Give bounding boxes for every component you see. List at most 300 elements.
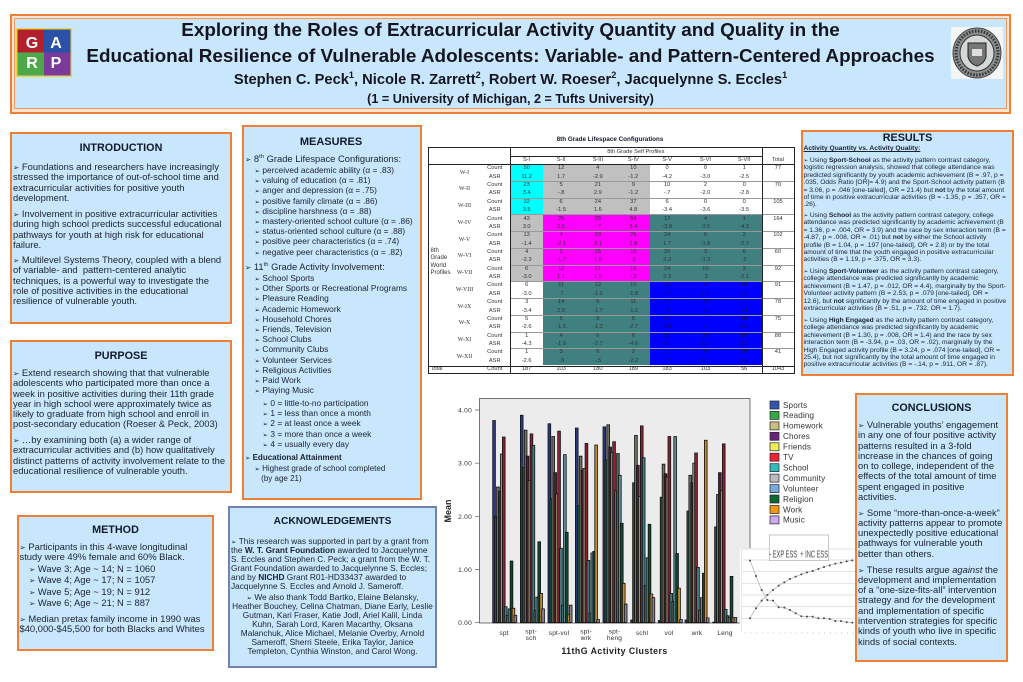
text: thanks: Malanchuk, Alice Michael, Melanie Overby, Arnold [241, 628, 424, 638]
chart legend: Sports [783, 401, 807, 410]
table: cross-tabulation of world and self profiles: 0 [743, 199, 746, 205]
text: purpose paragraph 2 [13, 434, 225, 476]
chart legend: Chores [783, 432, 810, 441]
table: cross-tabulation of world and self profiles: 91 [775, 282, 781, 288]
text: activity list: ➢ School Clubs [254, 334, 312, 344]
table: cross-tabulation of world and self profiles: ASR [489, 174, 501, 180]
table: cross-tabulation of world and self profiles: Count [487, 249, 502, 255]
table: cross-tabulation of world and self profiles: Count [487, 199, 502, 205]
text: sport-school result: ➢ Using Sport-School as the activity pattern contrast category, [804, 157, 990, 164]
text: purpose paragraph 1: year in high school were approximately twice as [13, 398, 212, 409]
text: conclusion 2 [858, 506, 1002, 559]
text: lifespace list [254, 165, 413, 257]
title: Educational Resilience of Vulnerable Adolescents: Variable- and Pattern-Centered Approaches [86, 46, 935, 66]
table: cross-tabulation of world and self profiles: 6 [596, 349, 599, 355]
text: funding: S. Eccles and Stephen C. Peck; a grant from the W. T. [231, 554, 430, 564]
table: cross-tabulation of world and self profiles: 3.0 [523, 224, 531, 230]
inset line chart: exp ess and inc ess [740, 535, 855, 637]
text: conclusion 1: effects of the total amount of time [858, 470, 996, 481]
text: method waves: ➢ Wave 5; Age ~ 19; N = 912 [29, 586, 150, 597]
text: purpose paragraph 1: likely to graduate from high school and enroll in [13, 408, 209, 419]
table: cross-tabulation of world and self profiles: 2 [704, 182, 707, 188]
text: school result: = 1.36, p = .004, OR = 3.9) and the race by sex interaction term (B = [804, 227, 1006, 234]
affiliations: (1 = University of Michigan, 2 = Tufts University) [367, 92, 654, 106]
table: cross-tabulation of world and self profiles: 6 [525, 282, 528, 288]
x axis labels: spt-vol [549, 630, 570, 637]
table: cross-tabulation of world and self profiles: -.7 [664, 190, 670, 196]
table: cross-tabulation of world and self profiles: -3.0 [522, 291, 532, 297]
text: thanks: Templeton, Cynthia Winston, and Carol Wong. [247, 646, 418, 656]
text: sport-volunteer result [804, 268, 1006, 312]
text: activity list: ➢ Volunteer Services [254, 355, 332, 365]
table: cross-tabulation of world and self profiles: 11 [630, 299, 636, 305]
text: educational attainment heading: ➢ Educational Attainment [245, 453, 342, 462]
table: cross-tabulation of world and self profiles: W-I [460, 170, 469, 176]
header banner [10, 14, 1011, 114]
table: cross-tabulation of world and self profiles: 3.5 [740, 341, 748, 347]
table: cross-tabulation of world and self profiles: 9 [704, 349, 707, 355]
text: introduction paragraph 1: stressed the importance of out-of-school time and [13, 171, 219, 182]
table: cross-tabulation of world and self profiles: 75 [775, 316, 781, 322]
table: cross-tabulation of world and self profiles: -2.6 [522, 358, 532, 364]
text: purpose paragraph 1 [13, 367, 218, 429]
table: cross-tabulation of world and self profiles: 3 [560, 349, 563, 355]
table: cross-tabulation of world and self profiles: 2.3 [663, 274, 671, 280]
table: cross-tabulation of world and self profiles: ASR [489, 207, 501, 213]
table: cross-tabulation of world and self profiles: 10 [664, 349, 670, 355]
table: cross-tabulation of world and self profiles: 1.1 [740, 308, 748, 314]
table: cross-tabulation of world and self profiles: 6 [596, 333, 599, 339]
row group: W-I: 50 [523, 165, 530, 171]
header: profile columns: S-II [557, 157, 566, 163]
table: cross-tabulation of world and self profiles: 0 [704, 199, 707, 205]
y axis title: Mean [443, 499, 453, 523]
table: cross-tabulation of world and self profiles: 41 [775, 349, 781, 355]
table: cross-tabulation of world and self profiles: 10 [702, 266, 709, 272]
logo: GARP: A [50, 35, 62, 52]
table: cross-tabulation of world and self profiles: 1 [525, 333, 528, 339]
table: cross-tabulation of world and self profiles: 5 [704, 232, 707, 238]
table: cross-tabulation of world and self profiles: 24 [595, 199, 601, 205]
table: cross-tabulation of world and self profiles: 10 [741, 349, 747, 355]
table: cross-tabulation of world and self profiles: 28 [664, 282, 670, 288]
table: cross-tabulation of world and self profiles: 14 [702, 282, 709, 288]
row group: W-I: 0 [704, 165, 707, 171]
table: cross-tabulation of world and self profiles: 1.6 [594, 207, 602, 213]
table: cross-tabulation of world and self profiles: 1.7 [663, 241, 671, 247]
text: frequency scale: ➢ 1 = less than once a month [262, 408, 371, 418]
table: cross-tabulation of world and self profiles: -2.1 [739, 274, 749, 280]
table: cross-tabulation of world and self profiles: -3.8 [662, 224, 672, 230]
table: cross-tabulation of world and self profiles: ASR [489, 257, 501, 263]
label: world profiles: Profiles [430, 270, 451, 276]
row group: W-I: 10 [630, 165, 636, 171]
header: profile columns: S-I [523, 157, 530, 163]
table: cross-tabulation of world and self profiles: -3.0 [701, 174, 710, 180]
table: cross-tabulation of world and self profiles: 5 [525, 316, 528, 322]
table: cross-tabulation of world and self profiles: -.6 [558, 358, 564, 364]
table: cross-tabulation of world and self profiles: -2.0 [701, 190, 710, 196]
text: lifespace list: ➢ status-oriented school culture (α = .88) [254, 226, 405, 236]
table: cross-tabulation of world and self profiles: 9 [632, 182, 635, 188]
text: high engaged result: college attendance was predicted significantly by academic [804, 324, 979, 331]
table: cross-tabulation of world and self profiles: W-V [459, 237, 470, 243]
text: activity list: ➢ Household Chores [254, 314, 332, 324]
table: cross-tabulation of world and self profiles: W-VIII [456, 287, 473, 293]
table: cross-tabulation of world and self profiles: W-X [459, 320, 470, 326]
text: conclusion 1 [858, 419, 998, 502]
text: sport-school result: .26). [804, 201, 817, 208]
table: cross-tabulation of world and self profiles: ASR [489, 224, 501, 230]
table: cross-tabulation of world and self profiles: 164 [773, 216, 783, 222]
x axis title: 11thG Activity Clusters [561, 646, 668, 656]
logo: GARP: G [26, 35, 38, 52]
text: high engaged result: 25.4), but not significantly by the total amount of time engaged in [804, 354, 995, 361]
text: purpose paragraph 1: post-secondary education (Roeser & Peck, 2003) [13, 418, 218, 429]
text: introduction paragraph 3: of variable- and pattern-centered analytic [13, 264, 186, 275]
label: world profiles: Grade [430, 255, 447, 261]
y axis labels [458, 408, 472, 627]
text: method participants: study were 49% female and 60% Black. [20, 551, 185, 562]
table: cross-tabulation of world and self profiles: -2.9 [593, 174, 603, 180]
table: cross-tabulation of world and self profiles: -1.3 [593, 324, 603, 330]
row: totals: 103 [556, 366, 566, 372]
table: cross-tabulation of world and self profiles: 14 [558, 299, 564, 305]
table: cross-tabulation of world and self profiles: Count [487, 182, 502, 188]
bar chart: mean activity by cluster [443, 398, 855, 656]
header: profile columns [523, 157, 784, 163]
heading: introduction: INTRODUCTION [80, 142, 162, 154]
table: cross-tabulation of world and self profiles: -2.1 [556, 241, 566, 247]
text: conclusion 2: better than others. [858, 548, 934, 559]
text: lifespace list: ➢ valuing of education (α = .81) [254, 175, 370, 185]
text: introduction paragraph 1: development. [13, 192, 69, 203]
text: activity list: ➢ School Sports [254, 273, 314, 283]
row group: W-I: 77 [775, 165, 781, 171]
table: cross-tabulation of world and self profiles: ASR [489, 274, 501, 280]
text: sport-volunteer result: Volunteer activity pattern (B = 2.53, p = .079 [one-tailed], OR = [804, 290, 988, 297]
label: world profiles [430, 248, 451, 276]
bars: spt [493, 421, 517, 623]
chart legend: Volunteer [783, 484, 819, 493]
table: cross-tabulation of world and self profiles: W-II [459, 186, 470, 192]
table: cross-tabulation of world and self profiles: .2 [703, 324, 708, 330]
table: cross-tabulation of world and self profiles: 70 [775, 182, 781, 188]
table: cross-tabulation of world and self profiles: -3.0 [522, 274, 532, 280]
table: cross-tabulation of world and self profiles: -1.7 [593, 308, 603, 314]
text: conclusion 1: in any one of four positive activity [858, 429, 996, 440]
text: conclusion 3: and implementation of specific [858, 605, 984, 616]
table: cross-tabulation of world and self profiles: -2.8 [739, 190, 749, 196]
row: totals: 103 [701, 366, 710, 372]
table: cross-tabulation of world and self profiles: Count [487, 316, 502, 322]
text: sport-school result: .035, Odds Ratio [OR]= 4.9) and the Sport-School activity pattern (B [804, 179, 1005, 186]
table: cross-tabulation of world and self profiles: .3 [703, 274, 708, 280]
heading: conclusions: CONCLUSIONS [892, 402, 971, 414]
table: cross-tabulation of world and self profiles: W-VII [457, 270, 472, 276]
table: cross-tabulation of world and self profiles: 3 [525, 299, 528, 305]
table: cross-tabulation of world and self profiles: -1.7 [556, 257, 566, 263]
y axis labels: 3.00 [458, 461, 472, 468]
header: profile columns: S-III [593, 157, 603, 163]
chart legend [770, 401, 826, 525]
text: lifespace list: ➢ discipline harshness (α = .88) [254, 206, 371, 216]
text: thanks: Kuhn, Sarah Lord, Karen Macarthy, Oksana [252, 618, 413, 628]
table: cross-tabulation of world and self profiles: -4.3 [522, 341, 532, 347]
logo: GARP [16, 28, 72, 77]
text: thanks: ➢ We also thank Todd Bartko, Elaine Belansky, [246, 592, 419, 602]
text: school result: ➢ Using School as the activity pattern contrast category, college [804, 212, 994, 219]
text: school result [804, 212, 1006, 263]
text: lifespace list: ➢ positive family climate (α = .86) [254, 196, 377, 206]
text: activity list: ➢ Pleasure Reading [254, 293, 329, 303]
heading: method: METHOD [92, 524, 139, 536]
label: world profiles: 8th [430, 248, 439, 254]
table: cross-tabulation of world and self profiles: ASR [489, 341, 501, 347]
text: funding [231, 536, 430, 590]
table: cross-tabulation of world and self profiles: 78 [775, 299, 781, 305]
text: conclusion 2: unexpectedly positive educational [858, 527, 998, 538]
table: cross-tabulation of world and self profiles: 25 [595, 216, 601, 222]
table: cross-tabulation of world and self profiles: -.8 [558, 190, 564, 196]
text: purpose paragraph 2: distinct patterns of activity involvement relate to the [13, 455, 225, 466]
text: high engaged result: interaction term (B = -3.94, p = .03, OR = .02), marginally by the [804, 339, 993, 346]
x axis labels: vol [665, 630, 674, 637]
text: purpose paragraph 2: extracurricular activities and (b) how qualitatively [13, 444, 215, 455]
table: cross-tabulation of world and self profiles: 4 [560, 333, 563, 339]
text: conclusion 3: kinds of social contexts. [858, 636, 957, 647]
text: funding: the W. T. Grant Foundation awarded to Jacquelynne [231, 544, 427, 554]
table: cross-tabulation of world and self profiles: 2 [743, 232, 746, 238]
table: cross-tabulation of world and self profiles: 1 [525, 349, 528, 355]
table: cross-tabulation of world and self profiles: 1.5 [594, 274, 602, 280]
authors: Stephen C. Peck1, Nicole R. Zarrett2, Robert W. Roeser2, Jacquelynne S. Eccles1 [234, 70, 787, 88]
table: cross-tabulation of world and self profiles: 3 [743, 266, 746, 272]
x axis labels: sch [526, 635, 537, 642]
table: cross-tabulation of world and self profiles: 25 [558, 216, 564, 222]
row group: W-I: 1 [743, 165, 746, 171]
chart legend: Friends [783, 443, 811, 452]
text: method waves: ➢ Wave 6; Age ~ 21; N = 887 [29, 597, 150, 608]
text: frequency scale: ➢ 0 = little-to-no participation [262, 398, 369, 408]
table: cross-tabulation of world and self profiles: -1.5 [556, 324, 566, 330]
table: cross-tabulation of world and self profiles: Count [487, 232, 502, 238]
table: cross-tabulation of world and self profiles: 3.3 [663, 257, 671, 263]
table: cross-tabulation of world and self profiles: 2 [560, 249, 563, 255]
table: cross-tabulation of world and self profiles: 11 [558, 282, 564, 288]
text: purpose paragraph 1: ➢ Extend research showing that that vulnerable [13, 367, 210, 378]
text: method income: $40,000-$45,500 for both Blacks and Whites [20, 623, 205, 634]
table: cross-tabulation of world and self profiles: 12 [664, 216, 670, 222]
table: cross-tabulation of world and self profiles: 60 [775, 249, 781, 255]
table: cross-tabulation of world and self profiles: W-VI [458, 253, 471, 259]
table: cross-tabulation of world and self profiles: ASR [489, 324, 501, 330]
panel: purpose [10, 340, 232, 493]
text: activity list: ➢ Friends, Television [254, 324, 331, 334]
header inner panel [14, 18, 1007, 109]
title [86, 20, 935, 66]
text: conclusion 2: pathways for vulnerable youth [858, 537, 983, 548]
row: totals: 1043 [772, 366, 784, 372]
text: conclusion 3: intervention strategies for specific [858, 615, 997, 626]
table: cross-tabulation of world and self profiles: -2.7 [739, 241, 749, 247]
panel: introduction [10, 132, 232, 324]
text: method participants: ➢ Participants in this 4-wave longitudinal [20, 541, 187, 552]
text: conclusion 3: strategy and for the development [858, 594, 995, 605]
table: cross-tabulation of world and self profiles: 25 [630, 232, 636, 238]
icon: university seal [951, 27, 1003, 79]
table: cross-tabulation of world and self profiles: 4 [704, 216, 707, 222]
x axis labels: spt [499, 630, 509, 637]
text: conclusion 3: ➢ These results argue against the [858, 564, 998, 574]
text: activity list: ➢ Community Clubs [254, 344, 328, 354]
row: totals: Total [430, 366, 443, 372]
table: cross-tabulation of world and self profiles: 3.5 [523, 207, 531, 213]
text: funding: Jacquelynne S. Eccles and Arnold J. Sameroff. [231, 580, 403, 590]
table: cross-tabulation of world and self profiles: 3.4 [523, 190, 531, 196]
table: cross-tabulation of world and self profiles: 1.5 [740, 291, 748, 297]
y axis labels: 2.00 [458, 514, 472, 521]
text: introduction paragraph 1: extracurricular activities for positive youth [13, 182, 184, 193]
x axis labels: schl [636, 630, 649, 637]
table: cross-tabulation of world and self profiles: -2.7 [628, 324, 638, 330]
text: frequency scale: ➢ 3 = more than once a week [262, 429, 371, 439]
row group: W-I: 12 [558, 165, 564, 171]
text: conclusion 2: ➢ Some “more-than-once-a-week” [858, 506, 1000, 518]
bars: spt-vol [548, 424, 572, 623]
text: purpose paragraph 2: ➢ …by examining both (a) a wider range of [13, 434, 191, 445]
text: introduction paragraph 1 [13, 161, 219, 203]
x axis labels: spt- [580, 628, 592, 636]
table: cross-tabulation of world and self profiles: 2.5 [557, 224, 565, 230]
text: school result: profile (B = 1.04, p = .197 [one-tailed], OR = 2.8) or by the total [804, 242, 989, 248]
table: cross-tabulation of world and self profiles: 10 [664, 182, 670, 188]
table: cross-tabulation of world and self profiles: .2 [742, 257, 747, 263]
table: cross-tabulation of world and self profiles: Count [487, 282, 502, 288]
chart legend: Music [783, 516, 805, 525]
chart legend: Religion [783, 495, 813, 504]
table: cross-tabulation of world and self profiles: -2.2 [628, 358, 638, 364]
table: cross-tabulation of world and self profiles: 16 [630, 266, 636, 272]
text: sport-volunteer result: college attendance was predicted significantly by academic [804, 275, 979, 282]
table: cross-tabulation of world and self profiles: -3.5 [701, 224, 710, 230]
text: activity list: ➢ Religious Activities [254, 365, 332, 375]
table: cross-tabulation of world and self profiles: 1.1 [557, 274, 565, 280]
heading: results: RESULTS [883, 132, 932, 144]
text: method income: ➢ Median pretax family income in 1990 was [20, 612, 200, 624]
table: cross-tabulation of world and self profiles: Count [487, 216, 502, 222]
table: cross-tabulation of world and self profiles: 18 [741, 316, 747, 322]
table: cross-tabulation of world and self profiles: -1.2 [628, 190, 638, 196]
chart legend: TV [783, 453, 794, 462]
heading: acknowledgements: ACKNOWLEDGEMENTS [274, 516, 391, 527]
table: cross-tabulation of world and self profiles: 6.1 [702, 341, 709, 347]
table: cross-tabulation of world and self profiles: 3.8 [663, 324, 671, 330]
text: conclusion 1: ➢ Vulnerable youths’ engagement [858, 419, 998, 430]
table: cross-tabulation of world and self profiles: 4.1 [663, 341, 671, 347]
table: cross-tabulation of world and self profiles: 5.4 [629, 224, 637, 230]
logo: GARP: P [51, 55, 62, 72]
table: cross-tabulation of world and self profiles: -1.8 [628, 291, 638, 297]
text: thanks: Heather Bouchey, Celina Chatman, Diane Early, Leslie [232, 600, 433, 610]
header: profile columns: S-V [662, 157, 672, 163]
table: cross-tabulation of world and self profiles: -1.4 [522, 241, 532, 247]
table: cross-tabulation of world and self profiles: -3.6 [701, 207, 710, 213]
table: cross-tabulation of world and self profiles: 6 [632, 333, 635, 339]
text: sport-volunteer result: achievement (B = 1.47, p = .012, OR = 4.4), marginally by the Sport- [804, 283, 1006, 290]
table: cross-tabulation of world and self profiles: 5 [632, 316, 635, 322]
text: high engaged result: ➢ Using High Engaged as the activity pattern contrast category, [804, 317, 993, 324]
table: cross-tabulation of world and self profiles: 0 [743, 182, 746, 188]
heading: measures: MEASURES [300, 136, 362, 148]
chart legend: School [783, 464, 809, 472]
text: conclusion 1: on to college, independent of the [858, 460, 994, 471]
table: cross-tabulation of world and self profiles: 2.1 [702, 291, 709, 297]
table: cross-tabulation of world and self profiles: 24 [664, 232, 670, 238]
table: cross-tabulation of world and self profiles: -.2 [630, 274, 637, 280]
text: conclusion 3: kinds of youth who live in specific [858, 625, 996, 636]
text: thanks [232, 592, 433, 656]
text: lifespace list: ➢ negative peer characteristics (α = .82) [254, 247, 402, 257]
table: cross-tabulation of world and self profiles: 21 [595, 182, 601, 188]
y axis labels: 4.00 [458, 408, 472, 414]
row: totals: Count [487, 366, 502, 372]
text: purpose paragraph 2: educational resilience of vulnerable youth. [13, 465, 188, 476]
table: cross-tabulation of world and self profiles: 3 [704, 249, 707, 255]
bars: spt-heng [603, 425, 627, 623]
text: funding: Grant Foundation awarded to Jacquelynne S. Eccles; [231, 562, 427, 572]
table: cross-tabulation of world and self profiles: Count [487, 266, 502, 272]
table: cross-tabulation of world and self profiles: ASR [489, 308, 501, 314]
bars: wrk [685, 440, 709, 623]
table: cross-tabulation of world and self profiles: 105 [773, 199, 783, 205]
table: cross-tabulation of world and self profiles: ASR [489, 190, 501, 196]
row group: W-I: Count [487, 165, 502, 171]
table: cross-tabulation of world and self profiles: 54 [630, 216, 636, 222]
table: cross-tabulation of world and self profiles: -1.5 [556, 207, 566, 213]
table: cross-tabulation of world and self profiles: 37 [630, 199, 636, 205]
text: lifespace list: ➢ positive peer characteristics (α = .74) [254, 236, 399, 246]
row: totals: 189 [629, 366, 638, 372]
text: sport-school result: predicted significantly by youth academic achievement (B = .97, p = [804, 172, 1004, 179]
title: Exploring the Roles of Extracurricular Activity Quantity and Quality in the [181, 20, 840, 41]
row: totals: 183 [662, 366, 672, 372]
table: cross-tabulation of world and self profiles: -4.2 [739, 224, 749, 230]
table: cross-tabulation of world and self profiles: 10 [702, 299, 709, 305]
table title: 8th Grade Lifespace Configurations [557, 136, 663, 143]
table: cross-tabulation of world and self profiles: 1.8 [629, 241, 637, 247]
table: cross-tabulation of world and self profiles: 1.7 [557, 174, 565, 180]
y axis labels: 0.00 [458, 620, 472, 627]
label: world profiles: World [430, 263, 446, 269]
table: cross-tabulation of world and self profiles: -2.6 [522, 324, 532, 330]
text: introduction paragraph 3: resilience of vulnerable youth. [13, 295, 137, 306]
bars: schl [631, 426, 655, 623]
header: profile columns: Total [772, 157, 784, 163]
text: activity list: ➢ Other Sports or Recreational Programs [254, 283, 407, 293]
table: cross-tabulation of world and self profiles: -3.5 [739, 207, 749, 213]
chart legend: Community [783, 474, 826, 483]
text: method income [20, 612, 205, 634]
table: cross-tabulation of world and self profiles: 12 [595, 282, 601, 288]
table: cross-tabulation of world and self profiles: 15 [664, 299, 670, 305]
header: profile columns: S-VI [700, 157, 711, 163]
row: totals [430, 366, 784, 372]
table: cross-tabulation of world and self profiles: -4.6 [628, 341, 638, 347]
chart legend: Reading [783, 411, 814, 420]
row: totals: 56 [741, 366, 747, 372]
text: introduction paragraph 1: ➢ Foundations and researchers have increasingly [13, 161, 219, 172]
